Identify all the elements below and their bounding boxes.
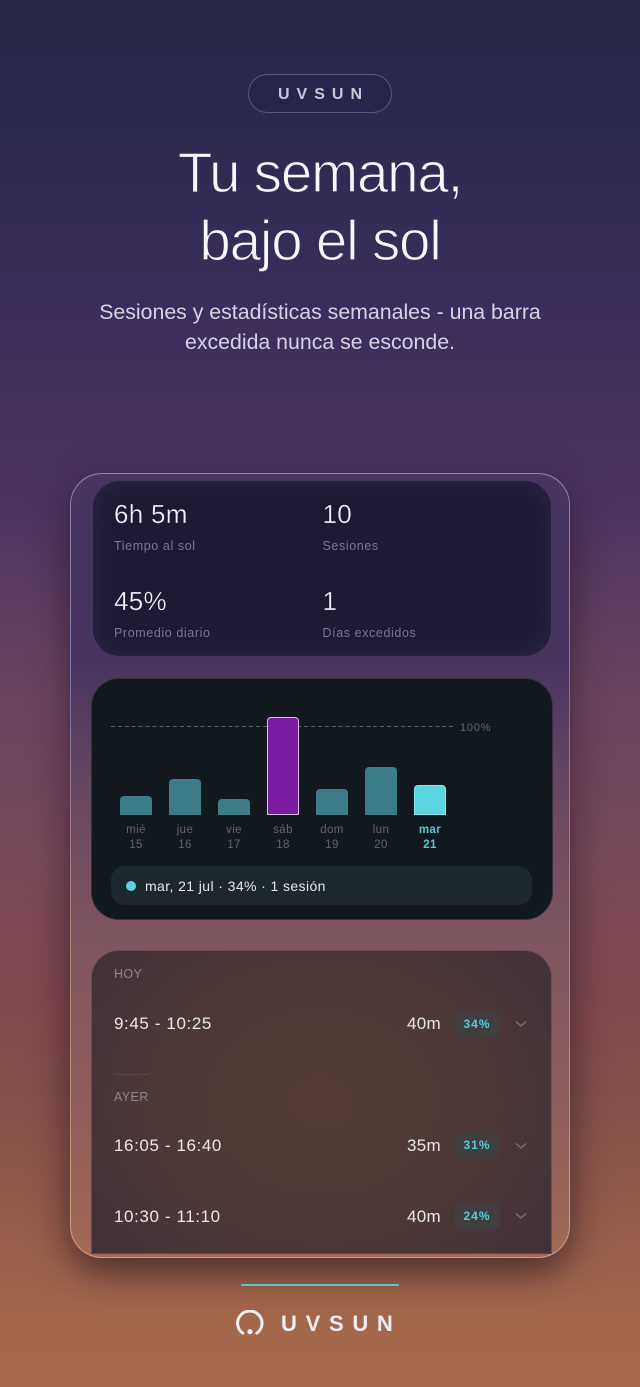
badge: UVSUN <box>248 74 392 113</box>
logo text: UVSUN <box>281 1311 402 1336</box>
subtitle <box>99 300 541 354</box>
panel: stats <box>92 480 552 657</box>
label: jue 16: 16 <box>178 839 192 851</box>
badge: 24%: 24% <box>463 1209 491 1223</box>
badge: 31%: 31% <box>463 1138 491 1152</box>
label: lun 20 <box>373 824 389 851</box>
label: lun 20: lun <box>373 824 389 836</box>
logo icon <box>236 1310 264 1335</box>
chevron <box>516 1143 526 1149</box>
label: sáb 18 <box>273 824 293 851</box>
duration: 35m: 35m <box>407 1136 441 1155</box>
accent line <box>241 1284 399 1286</box>
duration: 40m: 40m <box>407 1207 441 1226</box>
title <box>178 141 462 272</box>
bar: vie <box>218 799 250 815</box>
label: mar 21 <box>419 824 441 851</box>
divider <box>114 1074 149 1075</box>
label: jue 16: jue <box>177 824 193 836</box>
stat: días excedidos: 1 <box>322 586 337 616</box>
panel: sessions list <box>91 950 552 1254</box>
title: bajo el sol <box>199 209 441 272</box>
tooltip <box>111 866 532 905</box>
section label: ayer: AYER <box>114 1090 149 1104</box>
label: dom 19: dom <box>320 824 344 836</box>
tooltip text: mar, 21 jul · 34% · 1 sesión <box>145 878 326 894</box>
subtitle: excedida nunca se esconde. <box>185 330 455 354</box>
label: sáb 18: sáb <box>273 824 293 836</box>
stat: tiempo al sol: Tiempo al sol <box>114 539 196 553</box>
duration: 40m: 40m <box>407 1014 441 1033</box>
stat: sesiones: 10 <box>322 499 352 529</box>
label: vie 17: 17 <box>227 839 241 851</box>
tooltip dot <box>126 881 136 891</box>
label: vie 17 <box>226 824 242 851</box>
session: 10:30: 10:30 - 11:10 <box>114 1207 221 1226</box>
stat: sesiones <box>322 499 379 553</box>
label: dom 19: 19 <box>325 839 339 851</box>
chevron <box>516 1021 526 1027</box>
limit label: 100% <box>460 722 491 734</box>
label: lun 20: 20 <box>374 839 388 851</box>
title: Tu semana, <box>178 141 462 204</box>
stat: promedio diario: 45% <box>114 586 167 616</box>
stat: días excedidos: Días excedidos <box>322 626 416 640</box>
label: sáb 18: 18 <box>276 839 290 851</box>
bar: mié <box>120 796 152 815</box>
label: mié 15: mié <box>126 824 146 836</box>
limit line <box>111 726 454 727</box>
stat: tiempo al sol: 6h 5m <box>114 499 188 529</box>
badge: 31% <box>454 1133 500 1158</box>
panel: chart <box>91 678 553 920</box>
badge: 24% <box>454 1204 500 1229</box>
stat: promedio diario: Promedio diario <box>114 626 211 640</box>
subtitle: Sesiones y estadísticas semanales - una barra <box>99 300 541 324</box>
bar: dom <box>316 789 348 815</box>
label: mar 21: mar <box>419 824 441 836</box>
chevron <box>516 1213 526 1218</box>
label: vie 17: vie <box>226 824 242 836</box>
stat: días excedidos <box>322 586 416 640</box>
bar: mar <box>414 785 446 815</box>
badge: UVSUN: UVSUN <box>278 86 369 103</box>
section label: hoy: HOY <box>114 967 142 981</box>
stat: sesiones: Sesiones <box>322 539 379 553</box>
badge: 34% <box>454 1012 500 1037</box>
stat: tiempo al sol <box>114 499 196 553</box>
label: mié 15 <box>126 824 146 851</box>
stat: promedio diario <box>114 586 211 640</box>
label: jue 16 <box>176 824 193 851</box>
label: dom 19 <box>320 824 344 851</box>
badge: 34%: 34% <box>463 1017 491 1031</box>
session: 16:05: 16:05 - 16:40 <box>114 1136 222 1155</box>
bar: lun <box>365 767 397 815</box>
session: 9:45: 9:45 - 10:25 <box>114 1014 212 1033</box>
label: mar 21: 21 <box>423 839 437 851</box>
bar: sáb <box>267 717 299 815</box>
label: mié 15: 15 <box>129 839 143 851</box>
bar: jue <box>169 779 201 815</box>
phone frame <box>70 473 570 1258</box>
